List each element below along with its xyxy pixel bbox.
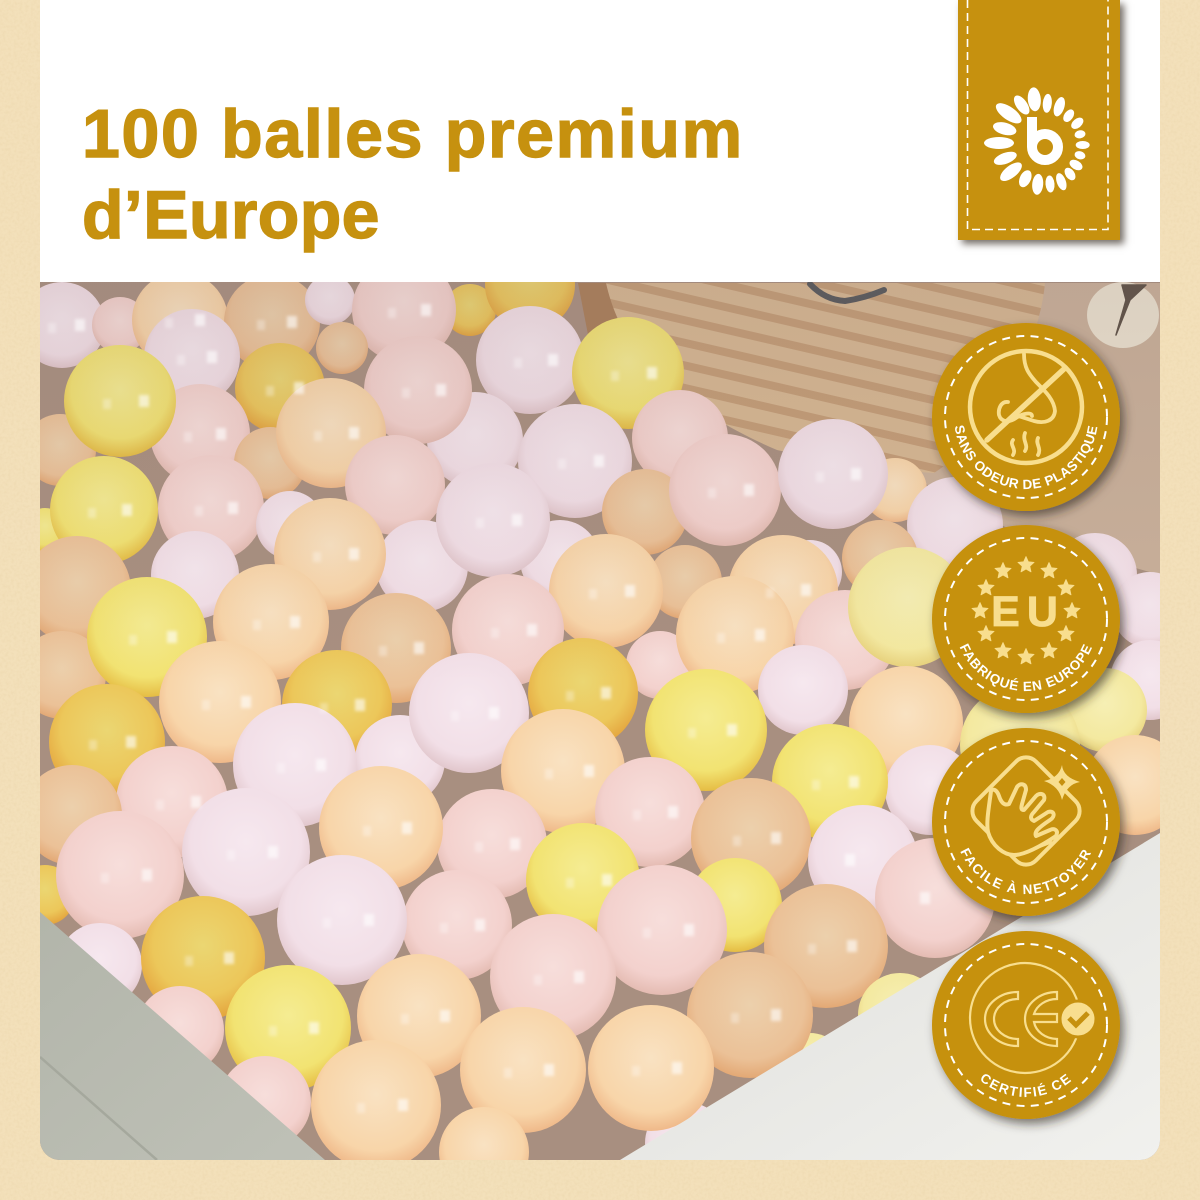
tag with logo [958,0,1120,240]
badge label: SANS ODEUR DE PLASTIQUE [955,426,1098,490]
badge label: FACILE À NETTOYER [960,848,1092,894]
badge label: FABRIQUÉ EN EUROPE [960,643,1092,692]
icon: hand wiping [967,752,1085,870]
badge: facile à nettoyer [928,726,1132,928]
title: d’Europe [82,177,380,253]
badge: sans odeur de plastique [929,321,1131,523]
badge: certifié CE [928,928,1132,1132]
icon: EU stars: EU [991,588,1065,636]
panel: header [40,0,1160,282]
ball pit [40,282,1160,1160]
badge: fabriqué en europe [928,523,1132,726]
icon: CE mark [970,963,1096,1073]
icon: EU stars [972,556,1080,664]
ball highlights [48,304,930,1113]
badge label: CERTIFIÉ CE [981,1074,1072,1098]
box corner: left wall [40,912,325,1160]
icon: crossed nose [970,351,1082,463]
title [82,96,744,253]
icon: sunflower logo [984,87,1090,195]
dim haze over far balls [40,282,1160,522]
pillow [578,283,1045,473]
photo: ball pit with badges [40,282,1160,1160]
teddy bear [900,282,1160,575]
title: 100 balles premium [82,96,744,172]
box corner: right wall [620,833,1160,1160]
